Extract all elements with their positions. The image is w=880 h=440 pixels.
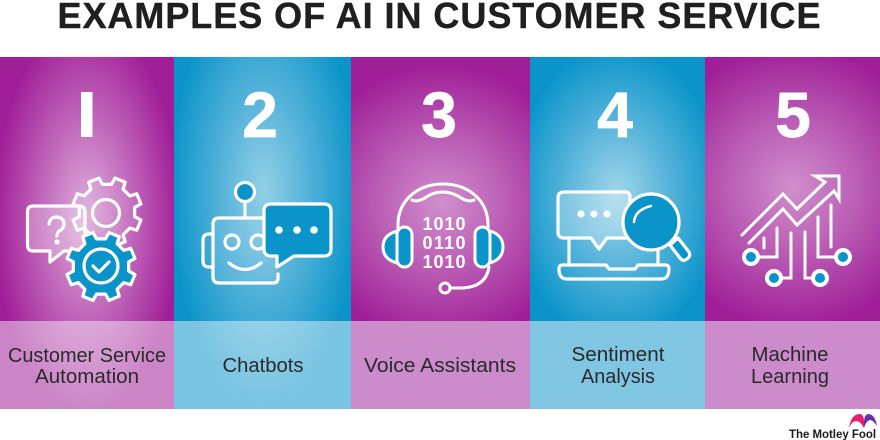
- panel: sentiment analysis: Analysis: [581, 366, 655, 388]
- binary digits: [422, 214, 466, 272]
- panel: machine learning: [705, 57, 880, 409]
- binary digits: 0110: [422, 233, 466, 253]
- icon: gears and question bubble: [28, 178, 141, 300]
- panel: customer service automation: Automation: [35, 366, 139, 388]
- number 5: 5: [775, 79, 811, 151]
- label: Chatbots: [222, 355, 304, 377]
- number 4: 4: [597, 79, 633, 151]
- number 3: 3: [421, 79, 457, 151]
- label: Machine: [752, 344, 828, 366]
- icon: jester hat: [849, 414, 877, 428]
- number 1: 1: [69, 79, 105, 151]
- panel: customer service automation: [0, 57, 174, 409]
- label: Sentiment: [572, 344, 665, 366]
- number 2: 2: [242, 79, 278, 151]
- panel: machine learning: Learning: [751, 366, 829, 388]
- number 1: [81, 92, 92, 137]
- logo: The Motley Fool: [789, 414, 877, 440]
- icon: laptop with magnifier: [558, 192, 690, 279]
- icon: robot with speech bubble: [203, 182, 331, 283]
- panel: chatbots: [174, 57, 351, 409]
- label: Voice Assistants: [364, 355, 516, 377]
- panel: voice assistants: [351, 57, 530, 409]
- binary digits: 1010: [422, 252, 466, 272]
- icon: headset with binary: [383, 184, 503, 293]
- binary digits: 1010: [422, 214, 466, 234]
- icon: rising chart with circuit nodes: [742, 176, 850, 285]
- panel: sentiment analysis: [530, 57, 705, 409]
- label: Customer Service: [8, 345, 166, 367]
